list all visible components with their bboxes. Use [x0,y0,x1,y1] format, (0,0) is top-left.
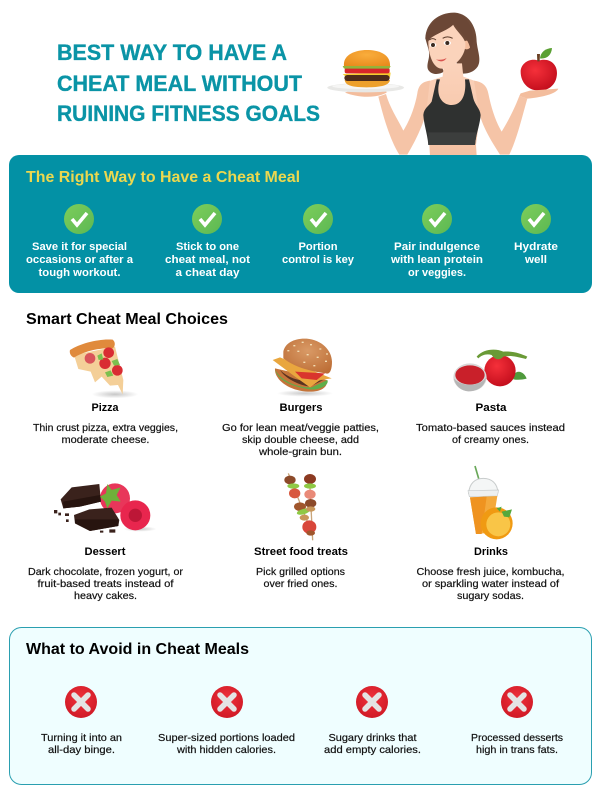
right arm [474,81,527,155]
tip: portion control: control is key [282,254,355,266]
choice: pizza: Thin crust pizza, extra veggies, [33,422,178,434]
title: CHEAT MEAL WITHOUT [57,71,303,96]
avoid item: sugary drinks: Sugary drinks that [328,732,417,744]
tip: hydrate: well [524,254,547,266]
icon: chocolate and raspberries [54,483,157,533]
tip: one cheat meal: Stick to one [176,241,239,253]
heading: avoid: What to Avoid in Cheat Meals [26,641,249,658]
tip: portion control: Portion [298,241,338,253]
avoid item: processed desserts: high in trans fats. [476,744,558,756]
choice: street food: over fried ones. [264,578,338,590]
choice: dessert [28,483,184,602]
avoid item: portions: with hidden calories. [176,744,276,756]
icon: pizza slice [70,339,138,398]
hair back [425,13,479,74]
choice: drinks: Drinks [474,546,508,558]
choice: burgers: Go for lean meat/veggie patties, [222,422,379,434]
avoid item: portions [158,686,295,756]
avoid item: portions: Super-sized portions loaded [158,732,295,744]
choice: pasta: of creamy ones. [452,434,529,446]
choice: street food [254,473,348,590]
tip: lean protein: Pair indulgence [394,241,480,253]
choice: pasta: Tomato-based sauces instead [416,422,565,434]
choice: street food: Street food treats [254,546,348,558]
tip: portion control [282,204,355,266]
title [57,40,320,126]
choice: drinks: or sparkling water instead of [422,578,559,590]
icon: juice cup and orange [468,466,513,539]
tip: lean protein: or veggies. [408,267,466,279]
heading: right way: The Right Way to Have a Cheat Meal [26,169,300,186]
tip: one cheat meal [165,204,250,279]
choice: dessert: fruit-based treats instead of [38,578,174,590]
tip: special occasions: Save it for special [32,241,127,253]
choice: burgers: skip double cheese, add [242,434,359,446]
choice: drinks [416,466,564,602]
title: BEST WAY TO HAVE A [57,40,287,65]
avoid item: processed desserts: Processed desserts [471,732,563,744]
icon: burger [273,339,333,397]
tip: special occasions [26,204,134,279]
choice: drinks: sugary sodas. [457,590,524,602]
choice: drinks: Choose fresh juice, kombucha, [416,566,564,578]
heading: smart choices: Smart Cheat Meal Choices [26,311,228,328]
choice: burgers: whole-grain bun. [258,446,342,458]
tip: special occasions: tough workout. [38,267,120,279]
choice: dessert: Dessert [84,546,126,558]
left arm [378,81,430,155]
choice: dessert: Dark chocolate, frozen yogurt, or [28,566,184,578]
choice: burgers [222,339,379,458]
torso and neck skin [424,63,480,155]
choice: dessert: heavy cakes. [74,590,137,602]
tip: special occasions: occasions or after a [26,254,134,266]
choice: pizza [33,339,178,446]
panel: what to avoid [10,628,592,784]
panel: the right way [9,155,592,293]
choice: pizza: Pizza [92,402,119,414]
icon: hand under plate [345,90,387,97]
tip: hydrate [514,204,558,266]
icon: burger on plate [343,50,391,87]
tip: one cheat meal: cheat meal, not [165,254,250,266]
icon: tomato and sauce [453,350,527,391]
avoid item: binge: Turning it into an [41,732,122,744]
tip: lean protein [390,204,483,279]
title: RUINING FITNESS GOALS [57,101,320,126]
illustration: woman holding burger and apple [327,13,558,155]
tip: lean protein: with lean protein [390,254,483,266]
avoid item: binge [41,686,122,756]
avoid item: processed desserts [471,686,563,756]
icon: apple [519,48,558,99]
avoid item: binge: all-day binge. [48,744,115,756]
choice: pasta: Pasta [476,402,507,414]
avoid item: sugary drinks: add empty calories. [324,744,421,756]
tip: one cheat meal: a cheat day [176,267,240,279]
choice: street food: Pick grilled options [256,566,345,578]
top [423,79,481,145]
icon: plate [327,83,404,92]
choice: pizza: moderate cheese. [62,434,150,446]
tip: hydrate: Hydrate [514,241,558,253]
avoid item: sugary drinks [324,686,421,756]
ear and face [462,41,471,49]
choice: burgers: Burgers [280,402,322,414]
choice: pasta [416,350,565,446]
icon: skewers [284,473,316,540]
